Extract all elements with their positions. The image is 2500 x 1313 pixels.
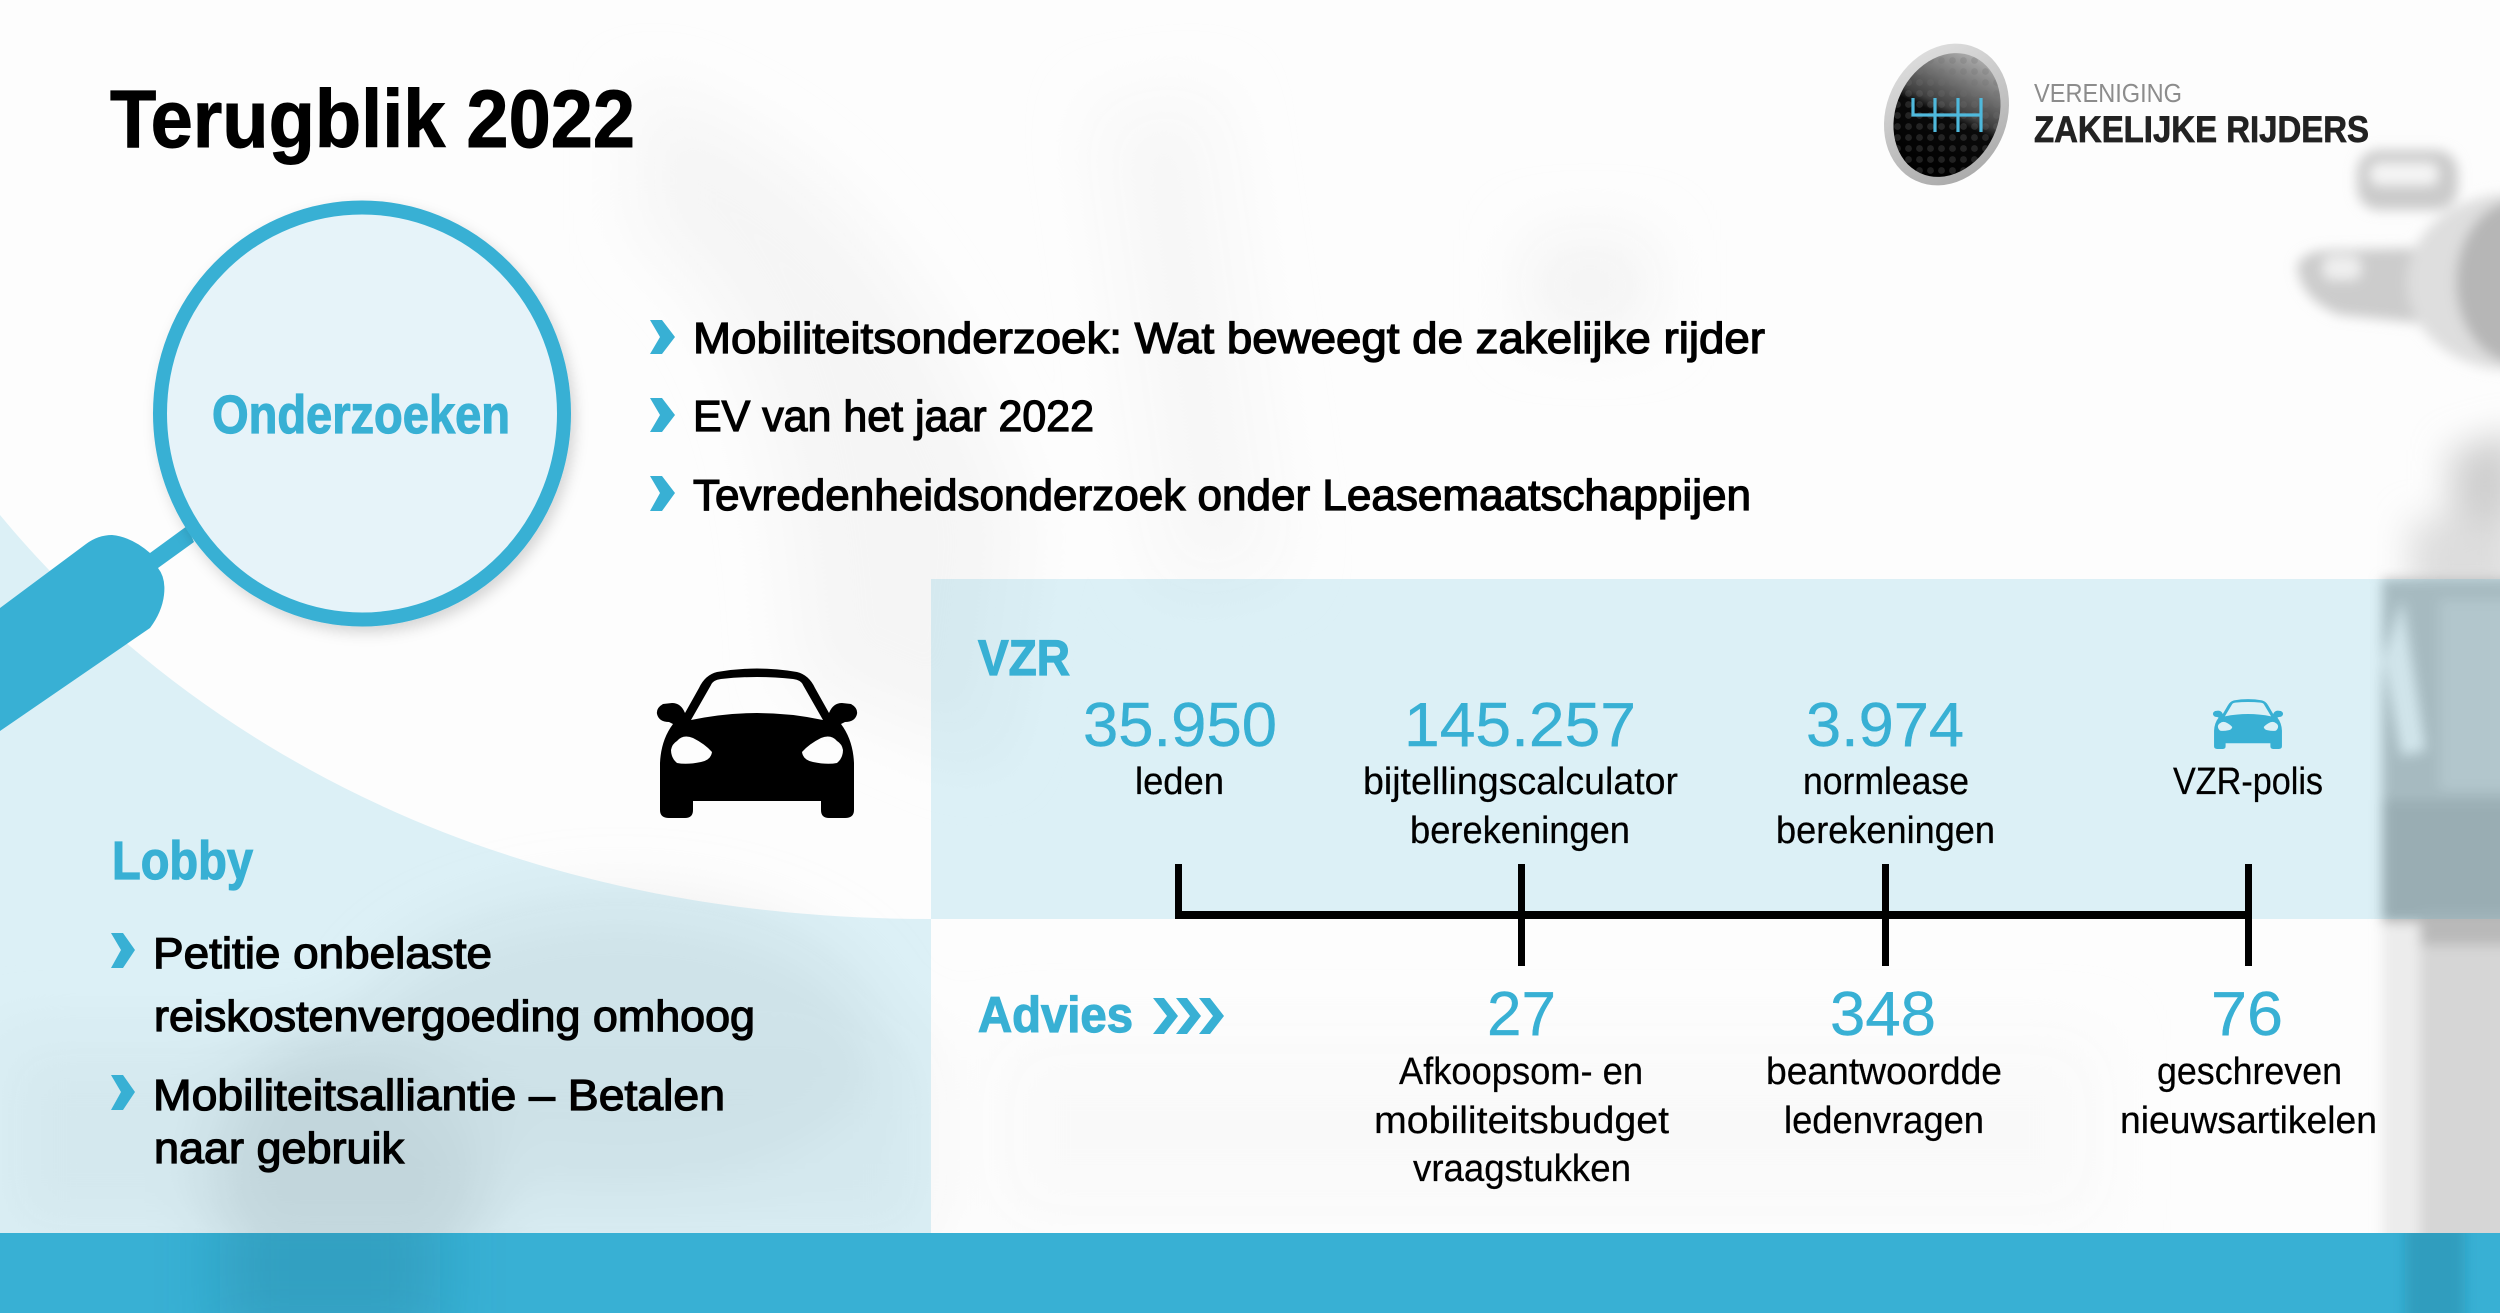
stat: vraagstukken: 27 <box>1487 980 1556 1049</box>
text: petitie: reiskostenvergoeding omhoog <box>154 992 755 1041</box>
list: onderzoeken <box>650 314 1765 520</box>
icon: chevron <box>111 1075 135 1110</box>
stat: normlease: normlease <box>1803 761 1969 803</box>
icon: chevron <box>650 320 675 354</box>
logo <box>1861 23 2369 206</box>
stat: vraagstukken: vraagstukken <box>1413 1148 1631 1190</box>
icon: triple chevron <box>1153 998 1224 1034</box>
stat: ledenvragen: beantwoordde <box>1766 1051 2002 1093</box>
stat: vraagstukken: mobiliteitsbudget <box>1374 1100 1669 1142</box>
stat: vraagstukken: Afkoopsom- en <box>1399 1051 1643 1093</box>
heading: Onderzoeken: Onderzoeken <box>212 385 510 445</box>
lens <box>160 208 564 620</box>
bottom bar <box>0 1233 2500 1313</box>
heading: Advies <box>978 987 1224 1043</box>
light blue curved region: lobby <box>0 515 931 1233</box>
icon: chevron <box>650 398 675 432</box>
title: Terugblik 2022 <box>110 74 635 165</box>
stat: leden <box>1083 691 1277 803</box>
magnifying glass <box>0 208 564 731</box>
text: petitie <box>153 929 755 1041</box>
stat: leden: 35.950 <box>1083 691 1277 760</box>
stat: normlease: berekeningen <box>1776 810 1995 852</box>
logo text <box>2034 78 2369 150</box>
icon: small car <box>2213 699 2283 749</box>
text: mobiliteitsalliantie <box>153 1071 725 1173</box>
heading: Advies: Advies <box>978 987 1133 1043</box>
text: mobiliteitsalliantie: Mobiliteitsalliantie – Betalen <box>153 1071 725 1120</box>
logo text: VERENIGING <box>2034 78 2182 108</box>
stat: leden: leden <box>1135 761 1224 803</box>
stat: bijtellingscalculator <box>1363 691 1678 852</box>
stat: nieuwsartikelen: nieuwsartikelen <box>2120 1100 2377 1142</box>
icon: chevron <box>111 933 135 968</box>
heading: VZR: VZR <box>978 630 1070 686</box>
text: petitie: Petitie onbelaste <box>153 929 492 978</box>
logo text: ZAKELIJKE RIJDERS <box>2034 109 2369 150</box>
stat: bijtellingscalculator: 145.257 <box>1404 691 1636 760</box>
stat: vraagstukken <box>1374 980 1669 1190</box>
text: mobiliteitsonderzoek: Mobiliteitsonderzoek: Wat beweegt de zakelijke rijder <box>693 314 1765 363</box>
stat: bijtellingscalculator: bijtellingscalculator <box>1363 761 1678 803</box>
heading: Lobby: Lobby <box>112 831 253 891</box>
timeline <box>1175 864 2252 966</box>
text: mobiliteitsalliantie: naar gebruik <box>154 1124 405 1173</box>
text: EV van het jaar: EV van het jaar 2022 <box>693 392 1094 441</box>
panel: VZR band <box>931 579 2500 919</box>
icon: gear shift knob <box>1884 44 2009 186</box>
text: tevredenheidsonderzoek: Tevredenheidsonderzoek onder Leasemaatschappijen <box>693 471 1751 520</box>
stat: nieuwsartikelen: 76 <box>2211 980 2283 1049</box>
stat: nieuwsartikelen <box>2120 980 2377 1142</box>
stat: nieuwsartikelen: geschreven <box>2157 1051 2342 1093</box>
stat: ledenvragen: ledenvragen <box>1784 1100 1984 1142</box>
stat: normlease: 3.974 <box>1806 691 1964 760</box>
icon: car <box>657 668 857 818</box>
stat: VZR-polis: VZR-polis <box>2173 761 2323 803</box>
stat: normlease <box>1776 691 1995 852</box>
stat: bijtellingscalculator: berekeningen <box>1410 810 1630 852</box>
stat: ledenvragen: 348 <box>1830 980 1936 1049</box>
icon: handle <box>0 526 194 731</box>
stat: VZR-polis <box>2173 699 2323 803</box>
panel: lobby <box>111 831 755 1173</box>
icon: chevron <box>650 476 675 511</box>
stat: ledenvragen <box>1766 980 2002 1142</box>
